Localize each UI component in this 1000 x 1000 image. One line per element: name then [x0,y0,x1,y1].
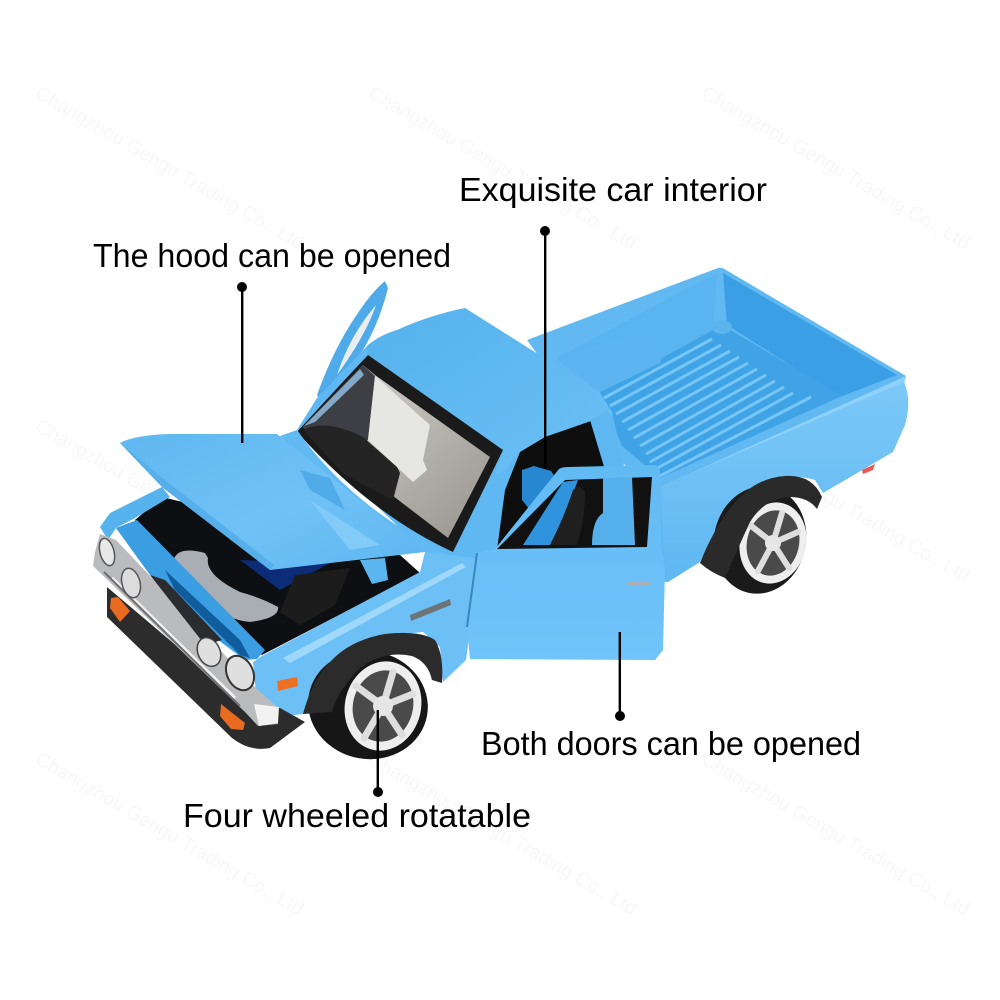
callout: hood: The hood can be opened [93,237,451,274]
hood [120,434,425,570]
engine bay [135,497,420,655]
rear wheel arch [700,476,822,578]
callout: doors: Both doors can be opened [481,725,861,762]
wheel box [560,332,663,392]
rim highlight [660,376,906,494]
fender highlight [283,563,466,663]
windshield [297,355,503,552]
door hinge gap [467,553,477,627]
callout: doors [481,632,861,762]
watermark pattern: Changzhou Gengu Trading Co., Ltd [698,82,974,254]
watermark pattern [32,82,974,920]
fender side badge [410,599,451,621]
side marker [277,677,298,691]
callout: hood [93,237,451,443]
front wheel arch [303,633,442,714]
seat through window [523,480,578,545]
far open door [317,281,388,400]
bed side panel [640,382,908,582]
watermark pattern: Changzhou Gengu Trading Co., Ltd [698,415,974,587]
black bumper valance [107,587,305,749]
callout: interior: Exquisite car interior [459,171,767,208]
front inner panel [116,520,265,660]
watermark pattern: Changzhou Gengu Trading Co., Ltd [364,82,641,254]
door window opening [497,477,652,549]
callout: interior [459,171,767,469]
B pillar [590,411,632,545]
left fender [100,487,170,540]
right fender and cowl [253,552,475,717]
watermark pattern: Changzhou Gengu Trading Co., Ltd [32,748,308,920]
watermark pattern: Changzhou Gengu Trading Co., Ltd [698,748,974,920]
tie-down [712,320,732,334]
watermark pattern: Changzhou Gengu Trading Co., Ltd [32,415,308,587]
cab base [297,308,665,640]
chrome grille and headlights [93,534,279,726]
front wheel [300,641,436,769]
side window opening [497,420,612,550]
cab roof [368,308,612,475]
watermark pattern: Changzhou Gengu Trading Co., Ltd [364,748,641,920]
cowl strip [280,430,455,558]
orange indicators [110,597,245,730]
pickup bed [527,268,906,500]
rear wheel [704,478,816,602]
watermark pattern: Changzhou Gengu Trading Co., Ltd [32,82,308,254]
callout: wheels [183,710,531,834]
dark headrest through window [550,487,585,545]
bed floor ribs [604,339,811,477]
callout: wheels: Four wheeled rotatable [183,797,531,834]
door handle [628,581,651,586]
rear red marker [862,464,875,474]
interior seat top [522,466,557,510]
pickup truck model [93,268,908,769]
pillar through window [592,477,635,545]
open driver door [467,465,665,660]
